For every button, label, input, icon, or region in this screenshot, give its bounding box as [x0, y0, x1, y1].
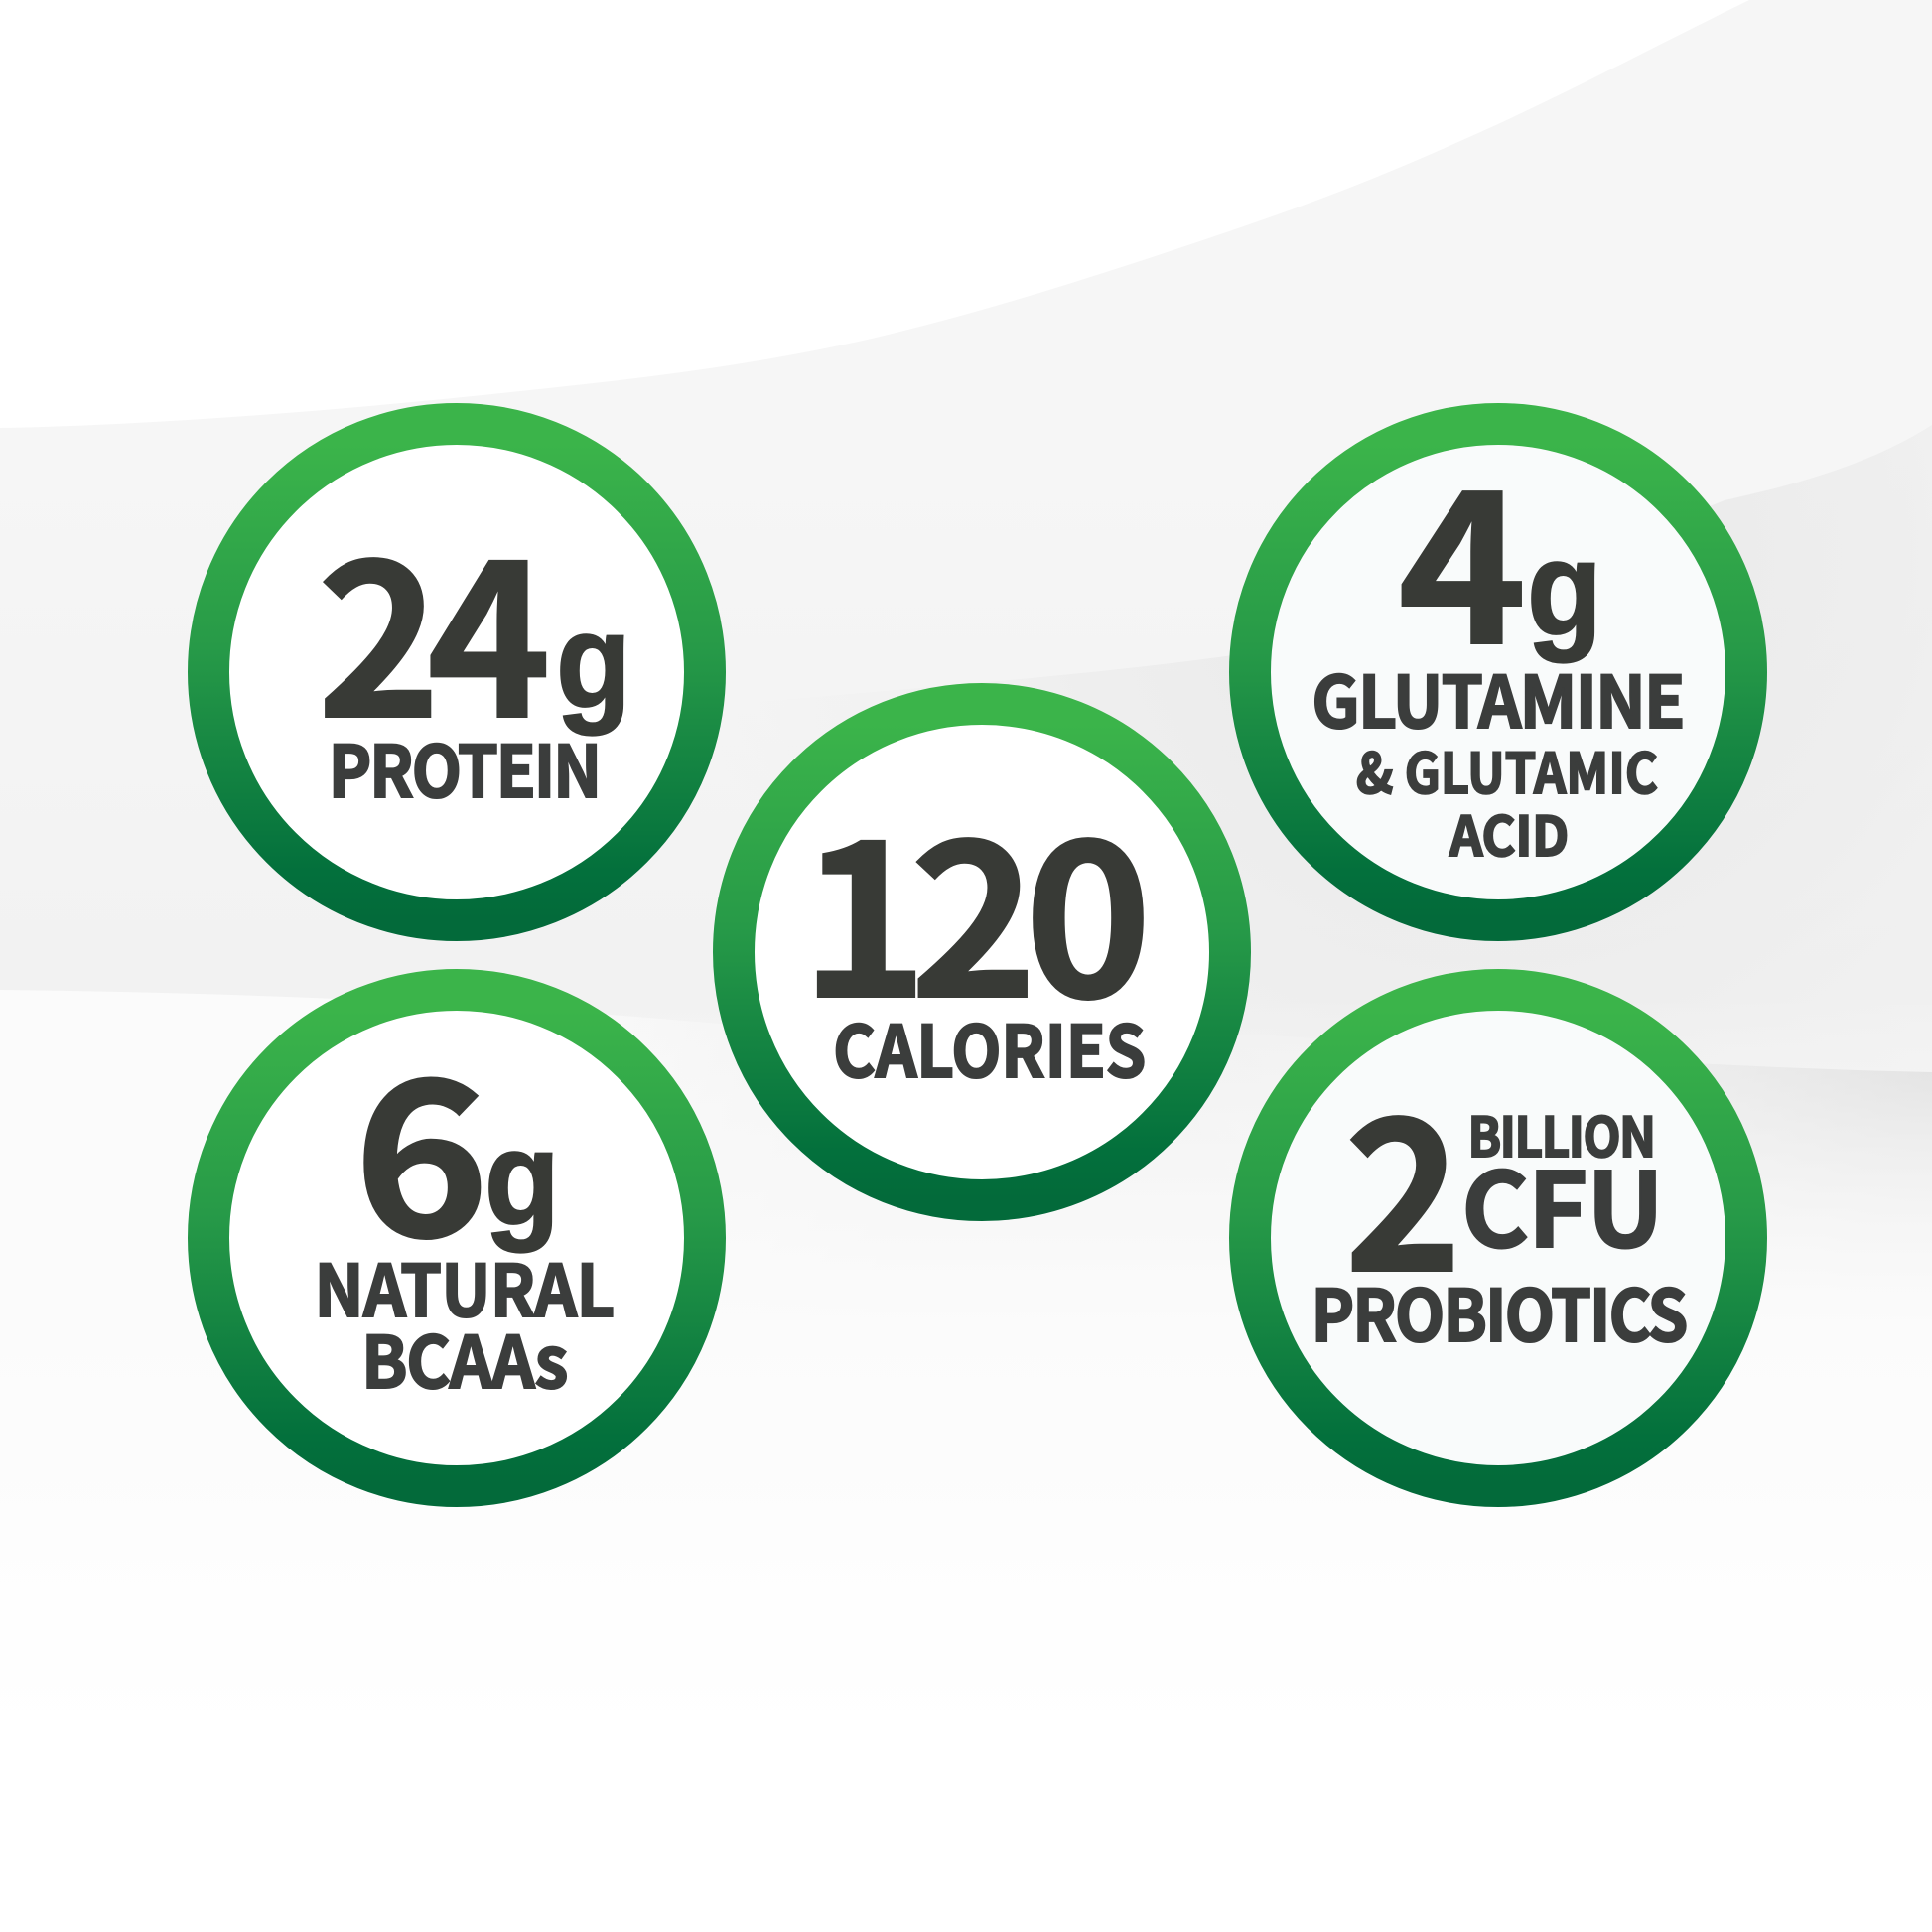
- unit: g: g: [556, 586, 631, 736]
- ring: 2 billion CFU probiotics: [1250, 990, 1746, 1486]
- number: 120: 120: [800, 754, 1152, 1058]
- ring: 120 calories: [734, 704, 1230, 1200]
- ring: 24g protein: [208, 424, 705, 920]
- badge: 2 billion CFU probiotics: [1250, 990, 1746, 1486]
- number: 2: 2: [1344, 1028, 1462, 1332]
- number: 24: 24: [317, 474, 551, 778]
- label: billion: BILLION: [1467, 1093, 1655, 1173]
- unit: g: g: [484, 1103, 560, 1253]
- label: CFU: CFU: [1461, 1127, 1662, 1277]
- label: BCAAs: BCAAs: [361, 1305, 567, 1409]
- badge: 120 calories: [734, 704, 1230, 1200]
- label: natural: NATURAL: [314, 1233, 615, 1337]
- badge: 24g protein: [208, 424, 705, 920]
- number: 6: 6: [353, 987, 489, 1299]
- ring: 4g glutamine: [1250, 424, 1746, 920]
- label: calories: CALORIES: [833, 994, 1146, 1098]
- badge: 4g glutamine: [1250, 400, 1746, 920]
- label: protein: PROTEIN: [329, 714, 600, 818]
- label: probiotics: PROBIOTICS: [1311, 1258, 1687, 1362]
- unit: g: g: [1527, 513, 1602, 663]
- ring: 6g natural BCAAs: [208, 990, 705, 1486]
- label: glutamine: GLUTAMINE: [1311, 644, 1684, 749]
- number: 4: 4: [1398, 400, 1527, 705]
- label: acid: ACID: [1449, 792, 1569, 872]
- label: and glutamic: & GLUTAMIC: [1356, 730, 1658, 810]
- badge: 6g natural BCAAs: [208, 987, 705, 1486]
